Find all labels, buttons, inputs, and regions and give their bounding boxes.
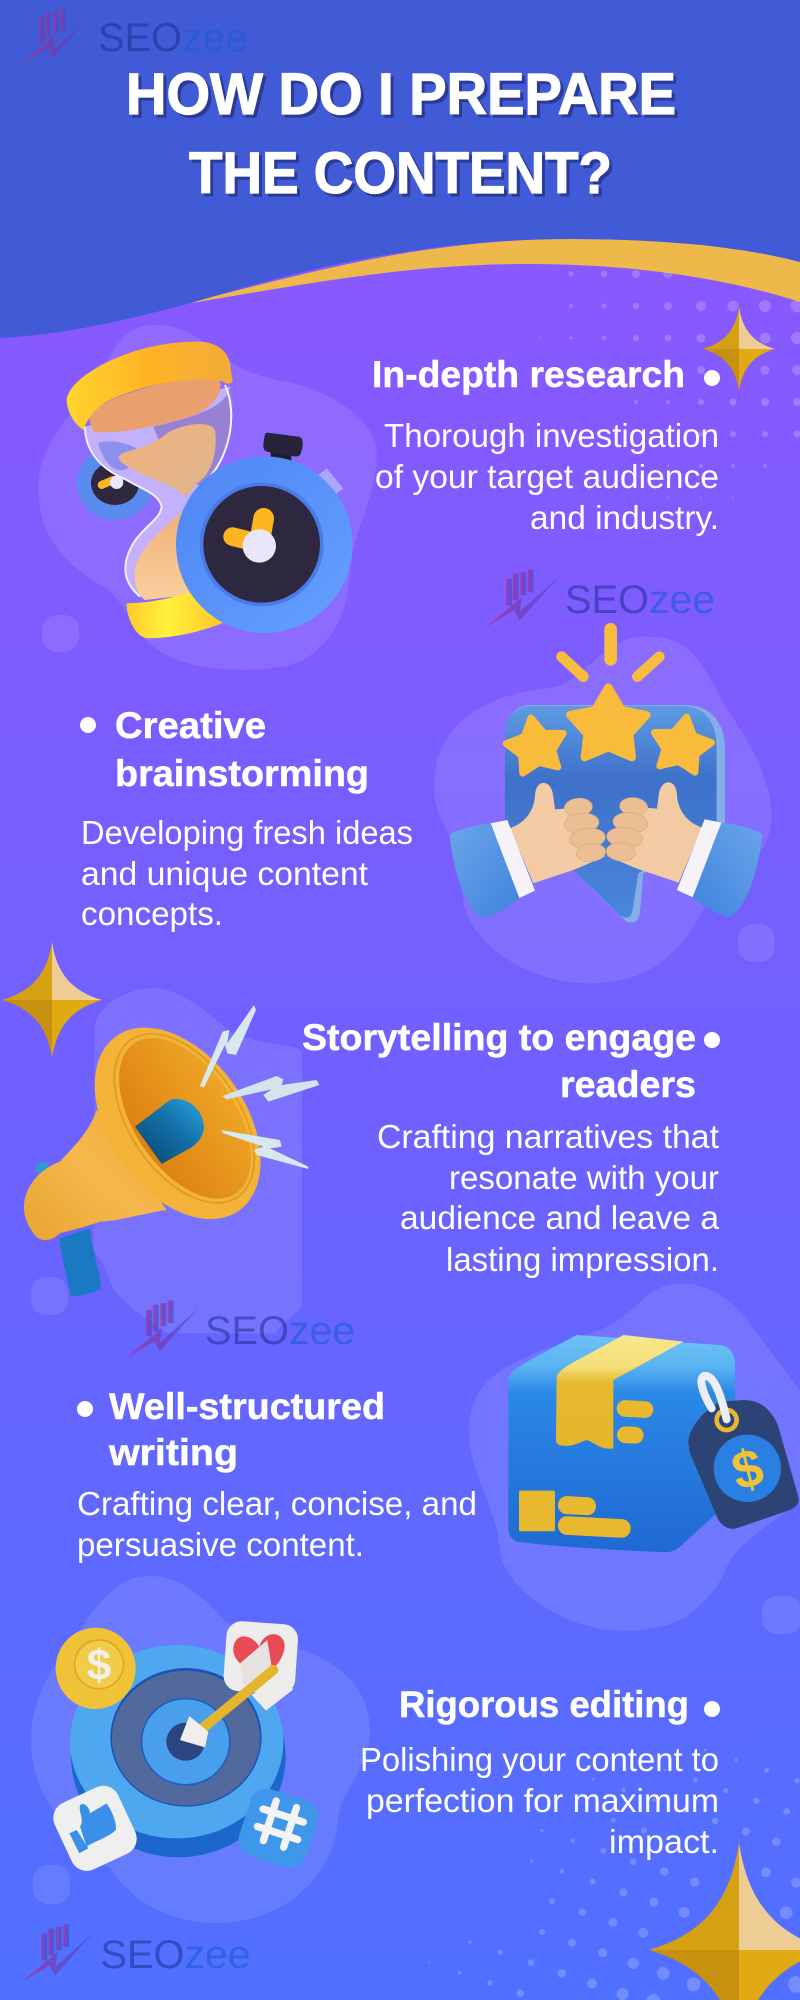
- bullet: [704, 1032, 720, 1048]
- watermark logo: top: zee: [182, 16, 248, 60]
- bullet: [704, 1701, 720, 1717]
- gold wave: [180, 239, 800, 305]
- text: editing description: [360, 1741, 719, 1860]
- halftone dots bottom right: [428, 1749, 800, 2000]
- text: research description: of your target audience: [375, 458, 719, 495]
- watermark logo: third: zee: [289, 1309, 355, 1353]
- star: left: [2, 942, 102, 1058]
- icon: hourglass and stopwatch: [67, 342, 353, 638]
- heading: creative brainstorming: Creative: [115, 705, 266, 746]
- star: bottom right: [649, 1843, 800, 2000]
- text: brainstorming description: [81, 814, 413, 932]
- icon: target with arrow: $: [87, 1641, 111, 1690]
- icon: target with arrow: [48, 1620, 322, 1876]
- small blob: editing: [33, 1865, 70, 1904]
- blob: storytelling: [93, 988, 302, 1333]
- watermark logo: top: [18, 7, 248, 66]
- text: writing description: Crafting clear, concise, and: [77, 1485, 477, 1522]
- bullet: [77, 1401, 93, 1417]
- icon: package with price tag: [508, 1335, 799, 1552]
- text: storytelling description: resonate with your: [449, 1159, 719, 1196]
- small blob: research: [42, 615, 79, 652]
- heading: storytelling: Storytelling to engage: [302, 1017, 696, 1058]
- heading: creative brainstorming: brainstorming: [115, 753, 369, 794]
- text: editing description: Polishing your content to: [360, 1741, 719, 1778]
- panel: storytelling: [24, 988, 720, 1333]
- text: brainstorming description: concepts.: [81, 895, 223, 932]
- heading: well-structured writing: Well-structured: [109, 1386, 385, 1427]
- title: [126, 62, 676, 206]
- title: THE CONTENT?: [189, 141, 612, 206]
- watermark logo: third: [125, 1300, 355, 1359]
- text: editing description: perfection for maximum: [366, 1782, 719, 1819]
- small blob: brainstorming: [738, 924, 775, 962]
- blob: editing: [31, 1576, 370, 1923]
- watermark logo: second: SEO: [565, 578, 649, 622]
- bullet: [704, 370, 720, 386]
- heading: well-structured writing: writing: [108, 1432, 238, 1473]
- heading: storytelling: [302, 1017, 696, 1105]
- heading: creative brainstorming: [115, 705, 369, 794]
- watermark logo: bottom: SEO: [100, 1933, 184, 1977]
- heading: storytelling: readers: [560, 1064, 696, 1105]
- blob: writing: [469, 1283, 800, 1630]
- text: brainstorming description: Developing fresh ideas: [81, 814, 413, 851]
- watermark logo: top: SEO: [98, 16, 182, 60]
- panel: in-depth research: [38, 325, 720, 670]
- blob: brainstorming: [434, 637, 772, 983]
- small blob: storytelling: [31, 1277, 68, 1315]
- text: writing description: [77, 1485, 477, 1563]
- header band: [0, 0, 800, 338]
- text: research description: Thorough investigation: [384, 417, 719, 454]
- heading: well-structured writing: [108, 1386, 385, 1473]
- icon: package with price tag: $: [726, 1438, 769, 1502]
- watermark logo: third: SEO: [205, 1309, 289, 1353]
- star: top right: [703, 307, 775, 391]
- blob: research: [38, 325, 377, 670]
- watermark logo: second: zee: [649, 578, 715, 622]
- heading: rigorous editing: Rigorous editing: [399, 1684, 689, 1725]
- text: research description: and industry.: [530, 499, 719, 536]
- panel: well-structured writing: [77, 1283, 800, 1634]
- icon: thumbs up and stars: [450, 629, 762, 922]
- text: storytelling description: audience and leave a: [400, 1199, 720, 1236]
- text: brainstorming description: and unique content: [81, 855, 368, 892]
- text: storytelling description: lasting impression.: [446, 1241, 719, 1278]
- panel: creative brainstorming: [80, 629, 775, 983]
- icon: megaphone: [24, 997, 319, 1297]
- text: research description: [375, 417, 719, 536]
- halftone dots top right: [539, 270, 800, 499]
- text: storytelling description: Crafting narratives that: [377, 1118, 719, 1155]
- text: writing description: persuasive content.: [77, 1526, 364, 1563]
- title: HOW DO I PREPARE: [126, 62, 676, 127]
- watermark logo: second: [485, 569, 715, 628]
- panel: rigorous editing: [31, 1576, 720, 1923]
- watermark logo: bottom: zee: [184, 1933, 250, 1977]
- text: editing description: impact.: [609, 1823, 719, 1860]
- heading: in-depth research: In-depth research: [372, 354, 685, 395]
- text: storytelling description: [377, 1118, 720, 1278]
- watermark logo: bottom: [21, 1924, 250, 1983]
- bullet: [80, 717, 96, 733]
- small blob: writing: [762, 1596, 800, 1634]
